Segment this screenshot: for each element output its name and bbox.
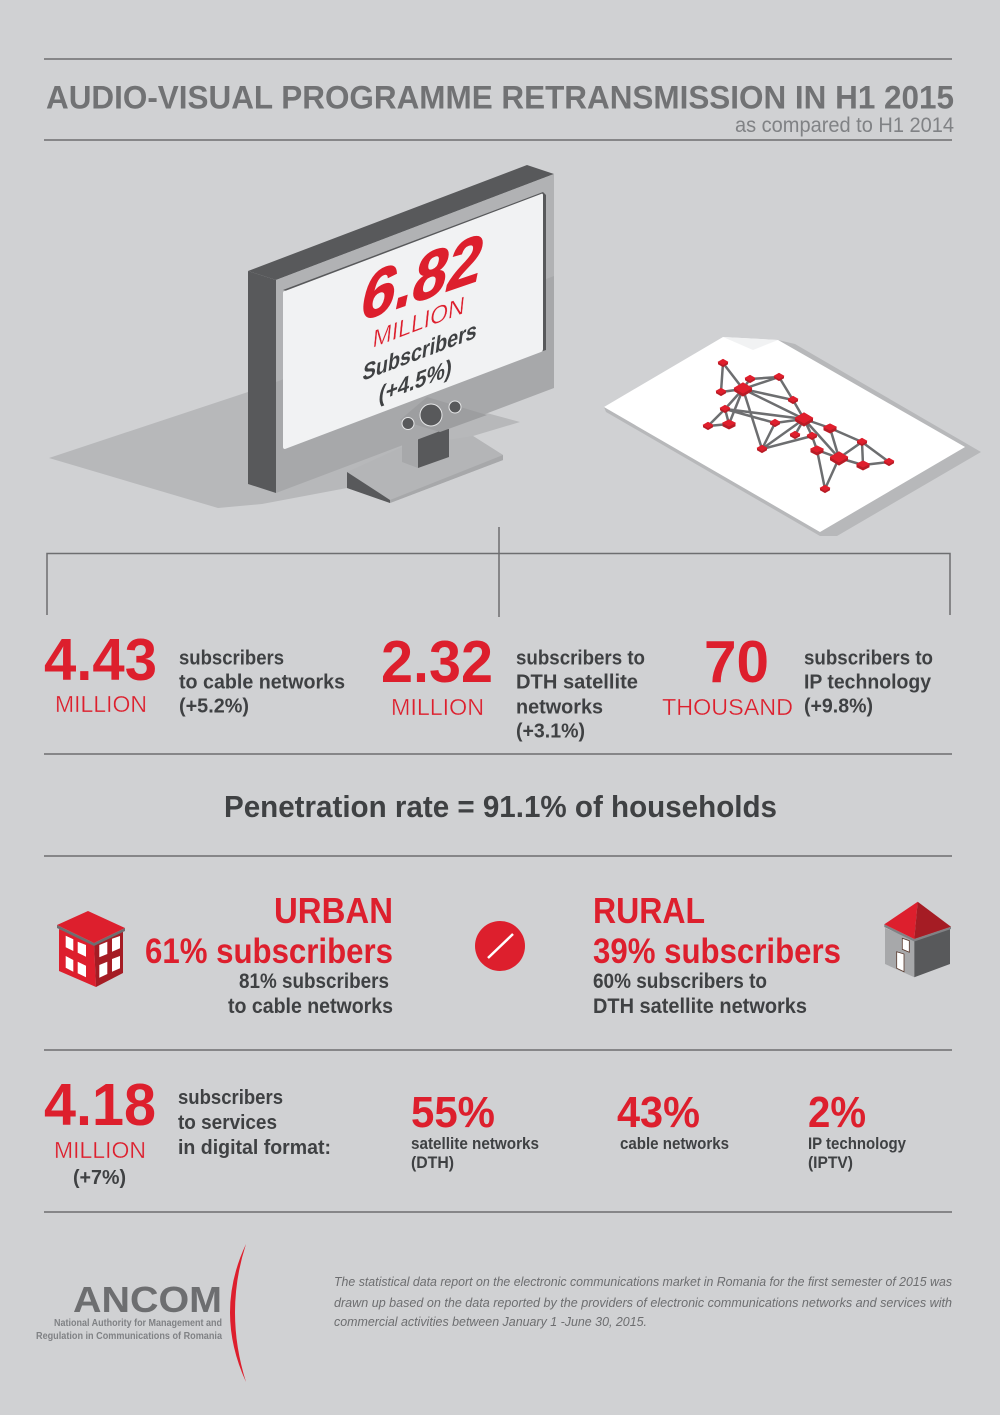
methodology note: drawn up based on the data reported by the providers of electronic communications networks and services with [334, 1295, 952, 1310]
stat: digital format subscribers: (+7%) [73, 1167, 126, 1189]
stat: cable networks: MILLION [55, 691, 147, 717]
screen value: 6.82 million subscribers: 6.82 [355, 218, 491, 337]
urban text [145, 890, 393, 1018]
stat: 2% IPTV: IP technology [808, 1134, 906, 1153]
screen [283, 194, 543, 449]
methodology note: The statistical data report on the electronic communications market in Romania for the first semester of 2015 was [334, 1274, 952, 1289]
urban text: 61% subscribers [145, 932, 393, 971]
paper shadow [604, 340, 981, 536]
rural text: DTH satellite networks [593, 995, 807, 1018]
screen value: 6.82 million subscribers [355, 218, 491, 409]
screen value: 6.82 million subscribers: Subscribers [361, 317, 479, 387]
stat: cable networks [44, 627, 345, 718]
illustration: television [49, 165, 554, 508]
icon: versus slash [475, 921, 525, 971]
title: as compared to H1 2014 [735, 114, 954, 137]
stat: DTH satellite [381, 629, 645, 742]
stat: IP technology: 70 [704, 629, 769, 695]
stat: cable networks: 4.43 [44, 627, 157, 693]
icon: rural house [884, 902, 951, 977]
stat: 2% IPTV: 2% [808, 1088, 866, 1137]
urban text: URBAN [274, 890, 393, 931]
stat: DTH satellite: subscribers to [516, 648, 645, 670]
screen value: 6.82 million subscribers: MILLION [371, 292, 466, 354]
logo: ANCOM: National Authority for Management and [54, 1318, 222, 1329]
speaker buttons [402, 401, 461, 430]
methodology note: commercial activities between January 1 -June 30, 2015. [334, 1314, 647, 1329]
title [46, 80, 954, 137]
stat: digital format subscribers: in digital format: [178, 1136, 331, 1159]
paper fold [723, 337, 778, 350]
screen value: 6.82 million subscribers: (+4.5%) [377, 354, 454, 409]
monitor shadow [49, 392, 520, 508]
rural text: 39% subscribers [593, 932, 841, 971]
stat: IP technology [662, 629, 933, 720]
network nodes [704, 360, 894, 492]
stat: digital format subscribers: subscribers [178, 1086, 283, 1109]
stat: DTH satellite: 2.32 [381, 629, 493, 695]
methodology note [334, 1274, 952, 1329]
stat: cable networks: to cable networks [179, 672, 345, 694]
icon: urban building [57, 911, 125, 987]
stat: 55% satellite: (DTH) [411, 1153, 454, 1172]
stat: DTH satellite: (+3.1%) [516, 720, 585, 742]
logo: ANCOM: Regulation in Communications of Romania [36, 1331, 222, 1342]
stat: IP technology: IP technology [804, 672, 932, 694]
penetration rate: Penetration rate = 91.1% of households [224, 789, 777, 824]
stat: digital format subscribers: MILLION [54, 1137, 146, 1163]
bracket connector [47, 527, 950, 617]
stat: IP technology: (+9.8%) [804, 696, 873, 718]
stat: digital format subscribers [44, 1072, 331, 1189]
stat: 43% cable: 43% [617, 1088, 700, 1137]
stat: 43% cable [617, 1088, 729, 1153]
paper [604, 337, 965, 532]
urban text: 81% subscribers [239, 970, 389, 993]
stat: DTH satellite: DTH satellite [516, 672, 638, 694]
title: AUDIO-VISUAL PROGRAMME RETRANSMISSION IN H1 2015 [46, 80, 954, 116]
stat: DTH satellite: networks [516, 696, 603, 718]
stat: DTH satellite: MILLION [391, 694, 484, 720]
urban text: to cable networks [228, 995, 393, 1018]
stat: cable networks: subscribers [179, 648, 284, 670]
stat: digital format subscribers: 4.18 [44, 1072, 156, 1138]
stand base [347, 436, 503, 503]
network links [708, 363, 889, 489]
stat: 2% IPTV [808, 1088, 906, 1172]
stat: 55% satellite: 55% [411, 1088, 495, 1137]
stat: cable networks: (+5.2%) [179, 696, 249, 718]
rural text: 60% subscribers to [593, 970, 767, 993]
stat: 2% IPTV: (IPTV) [808, 1153, 853, 1172]
logo: ANCOM: ANCOM [73, 1279, 222, 1320]
stat: 43% cable: cable networks [620, 1134, 729, 1153]
rural text: RURAL [593, 890, 705, 931]
illustration: network map on paper [604, 337, 981, 536]
stat: IP technology: subscribers to [804, 648, 933, 670]
monitor frame [248, 165, 554, 280]
stat: digital format subscribers: to services [178, 1111, 277, 1134]
logo: ANCOM [36, 1244, 246, 1382]
stat: 55% satellite [411, 1088, 539, 1172]
rural text [593, 890, 841, 1018]
stat: 55% satellite: satellite networks [411, 1134, 539, 1153]
stand neck [402, 435, 418, 468]
stat: IP technology: THOUSAND [662, 694, 793, 720]
